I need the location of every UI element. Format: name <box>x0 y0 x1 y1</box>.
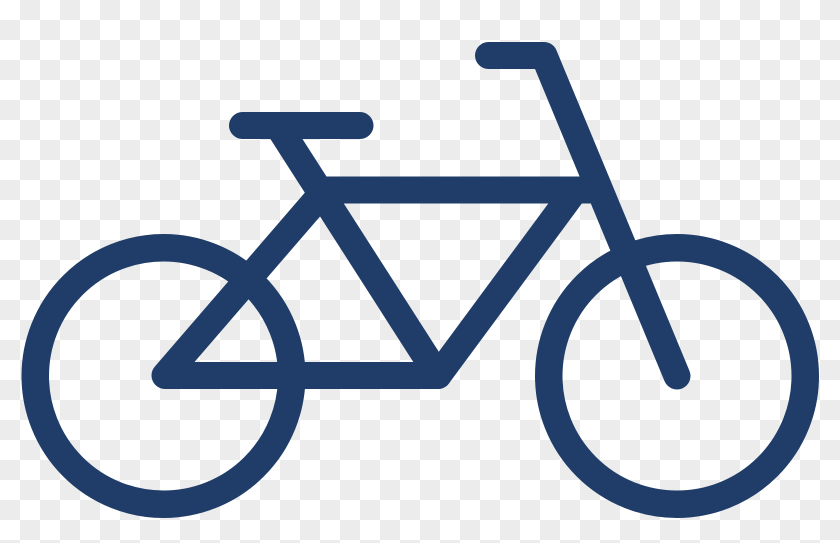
frame: top tube <box>325 176 594 204</box>
frame: rear diagonal tube <box>438 186 578 376</box>
handlebar and fork <box>488 56 677 376</box>
saddle <box>242 112 360 139</box>
frame: chain stay and seat stay <box>165 190 438 376</box>
left wheel <box>35 248 292 504</box>
icon: bicycle <box>35 56 805 504</box>
seat post and down tube <box>280 129 438 376</box>
right wheel <box>549 248 805 504</box>
